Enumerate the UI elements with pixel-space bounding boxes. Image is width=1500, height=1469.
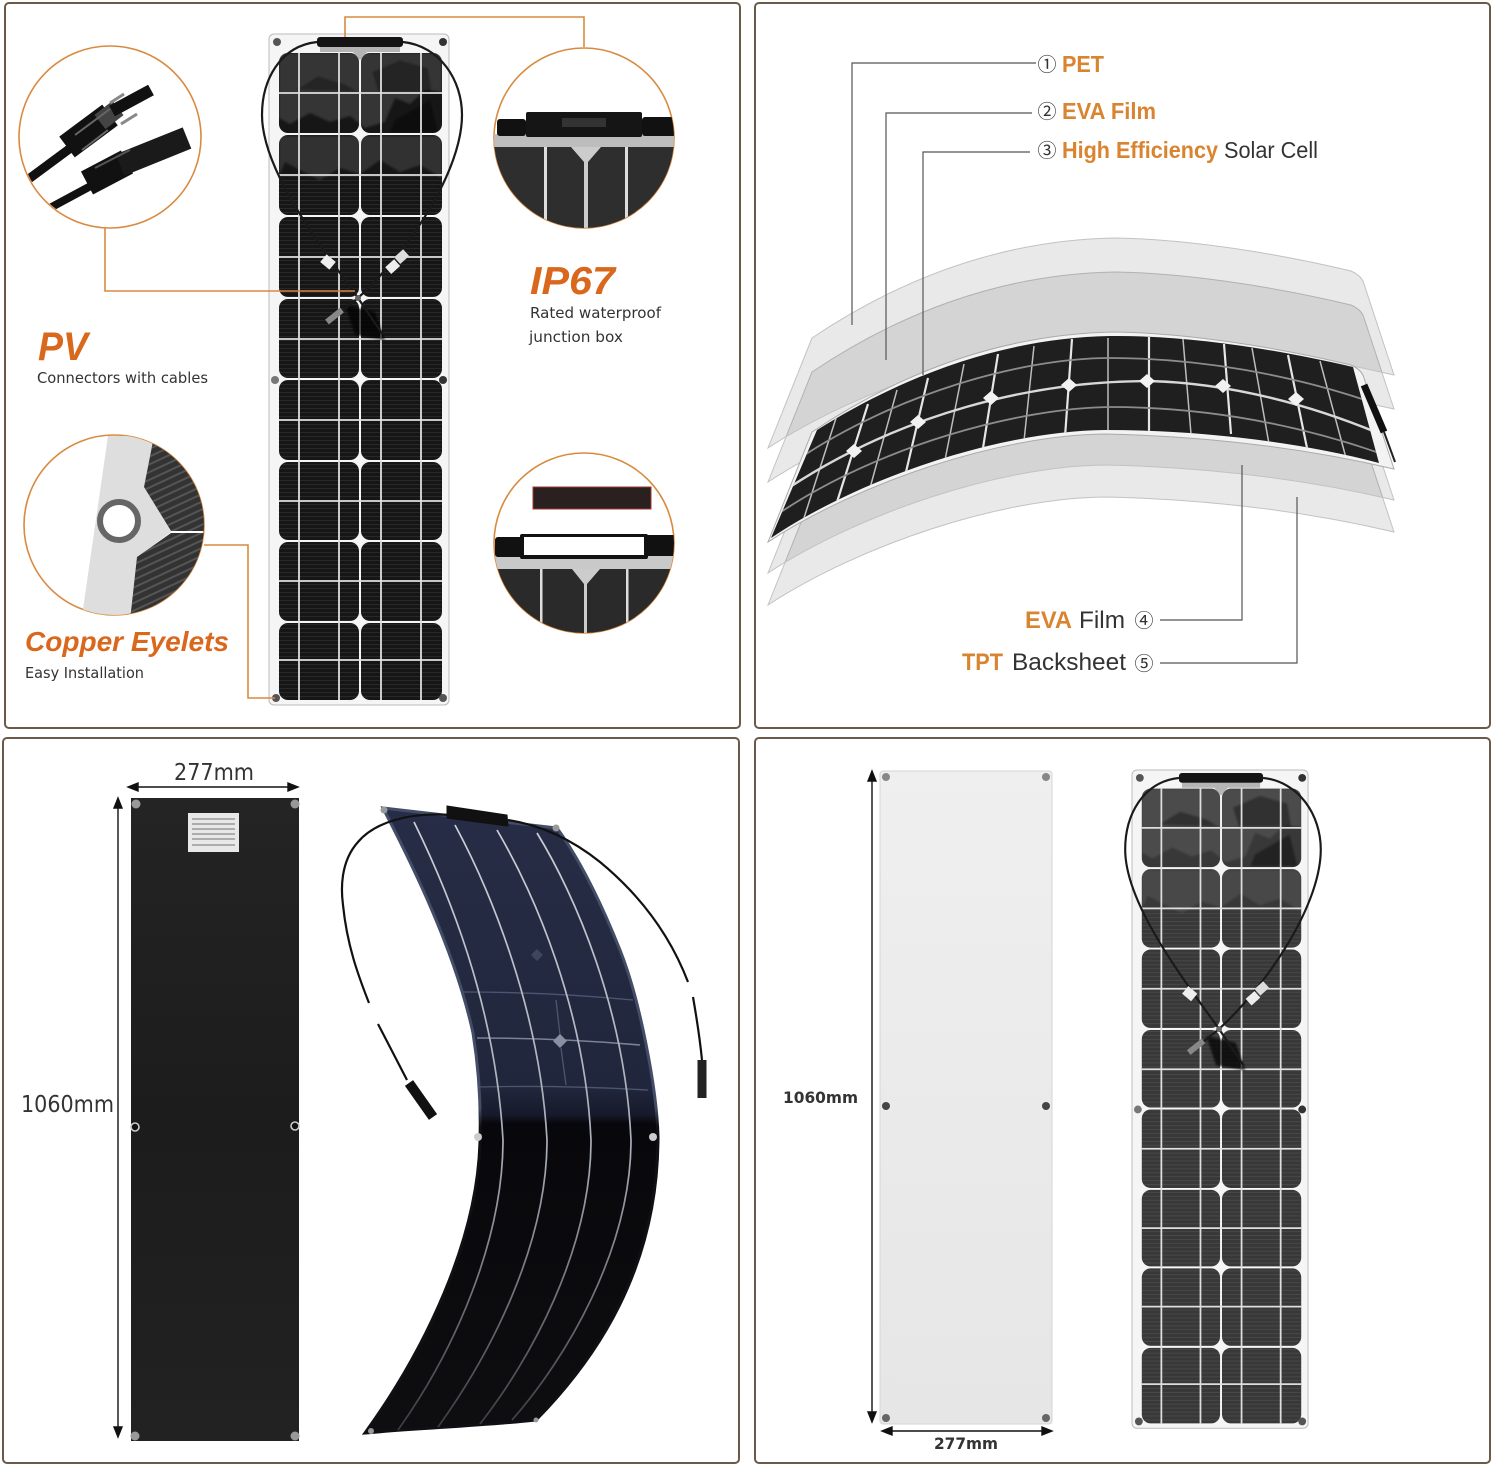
label: PET: ① (1037, 54, 1057, 76)
callout: PV (37, 325, 208, 387)
leader lines: top layers (852, 63, 1036, 375)
callout: PV: Connectors with cables (37, 369, 208, 387)
label: High Efficiency Solar Cell: Solar Cell (1224, 137, 1318, 163)
layer sheets (768, 238, 1394, 605)
label: High Efficiency Solar Cell (1037, 137, 1318, 163)
solar panel front with cable loop (262, 34, 462, 705)
label: PET: PET (1062, 51, 1104, 77)
label: EVA Film bottom: Film (1079, 607, 1125, 634)
label: TPT Backsheet: ⑤ (1134, 653, 1154, 675)
dimension: height 1060mm (783, 771, 876, 1422)
callout: Copper Eyelets: Copper Eyelets (25, 626, 229, 657)
dimension: height 1060mm: 1060mm (783, 1088, 858, 1107)
leader line: eyelet (204, 545, 275, 698)
label: TPT Backsheet (962, 649, 1154, 676)
curved solar cell layer (760, 325, 1400, 550)
label: PET (1037, 51, 1104, 77)
panel frame: top left (5, 3, 740, 728)
dimension: height 1060mm (21, 798, 122, 1437)
callout: PV: PV (38, 325, 91, 369)
label: EVA Film top: ② (1037, 101, 1057, 123)
callout: Copper Eyelets: Easy Installation (25, 664, 144, 682)
dimension: width 277mm: 277mm (174, 760, 254, 786)
panel frame: bottom right (755, 738, 1490, 1463)
white back sheet (880, 771, 1052, 1424)
panel: detail callouts (5, 3, 740, 728)
solar panel front with cable loop (1125, 770, 1321, 1428)
label: High Efficiency Solar Cell: High Efficiency (1062, 137, 1218, 163)
leader line: PV connector (105, 228, 355, 291)
label: High Efficiency Solar Cell: ③ (1037, 140, 1057, 162)
dimension: height 1060mm: 1060mm (21, 1092, 114, 1118)
circle: PV connectors (19, 46, 201, 228)
callout: IP67 (528, 260, 662, 346)
panel frame: bottom left (3, 738, 739, 1463)
callout: Copper Eyelets (25, 626, 229, 682)
panel frame: top right (755, 3, 1490, 728)
label: TPT Backsheet: TPT (962, 649, 1003, 676)
callout: IP67: junction box (528, 328, 623, 346)
label: EVA Film top: EVA Film (1062, 98, 1156, 124)
circle: junction box (490, 48, 680, 232)
dimension: width 277mm (128, 760, 298, 791)
circle: open junction box (490, 453, 680, 640)
panel: dimensions white back and front (755, 738, 1490, 1463)
callout: IP67: Rated waterproof (530, 304, 662, 322)
dimension: width 277mm (882, 1427, 1052, 1453)
leader line: junction box (345, 17, 584, 47)
black back sheet (130, 798, 300, 1441)
panel: layer structure (755, 3, 1490, 728)
callout: IP67: IP67 (530, 260, 617, 303)
circle: copper eyelet (24, 435, 210, 620)
label: EVA Film bottom: EVA (1025, 607, 1072, 634)
label: EVA Film bottom: ④ (1134, 610, 1154, 632)
dimension: width 277mm: 277mm (934, 1434, 998, 1453)
leader lines: bottom layers (1160, 465, 1297, 663)
junction box and cables (342, 806, 702, 1117)
label: EVA Film bottom (1025, 607, 1154, 634)
label: TPT Backsheet: Backsheet (1012, 649, 1126, 676)
curved flexible panel (365, 806, 658, 1434)
panel: dimensions black back (3, 738, 739, 1463)
